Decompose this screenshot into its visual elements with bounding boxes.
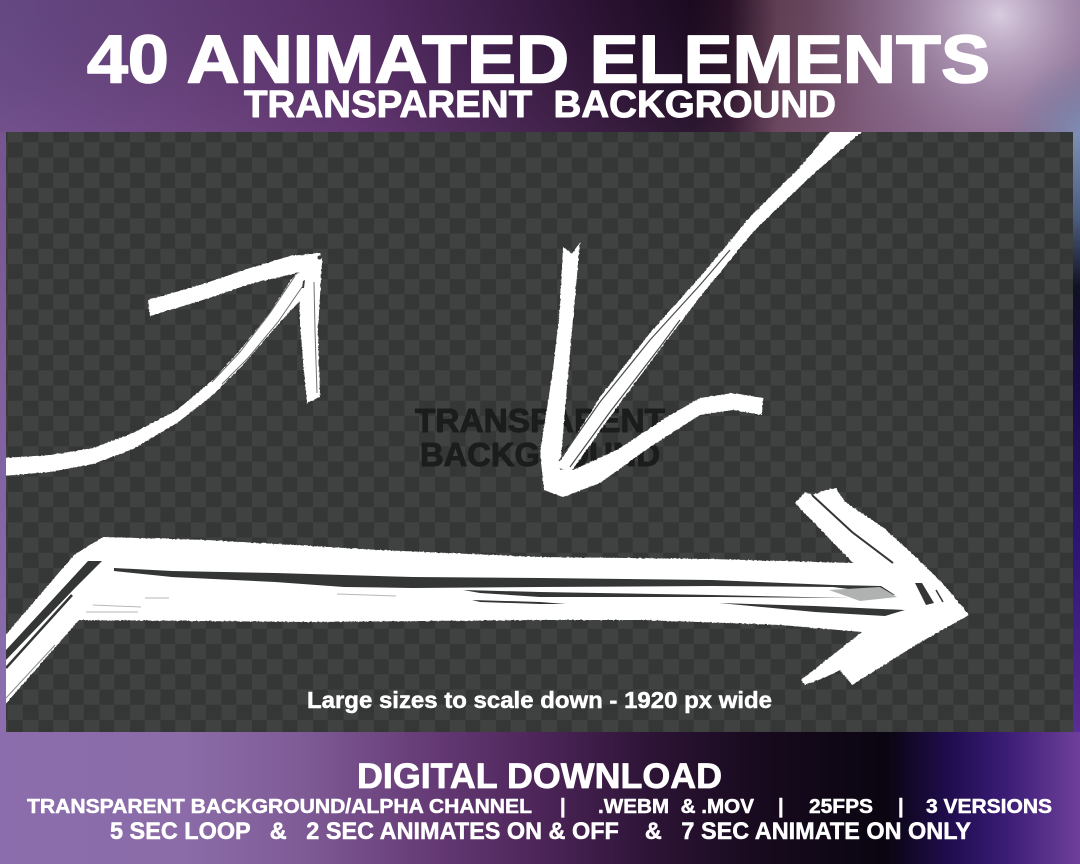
panel: transparent checkerboard preview	[2, 128, 1073, 732]
spec line: formats and versions: .WEBM & .MOV	[598, 796, 755, 818]
spec line: durations: 5 SEC LOOP & 2 SEC ANIMATES ON & OFF & 7 SEC ANIMATE ON ONLY	[110, 818, 971, 845]
spec line: formats and versions: |	[778, 796, 784, 818]
watermark: transparent background: BACKGROUND	[420, 436, 660, 473]
arrow: diagonal downward arrow, center	[540, 128, 866, 497]
background: left strip	[0, 132, 6, 732]
title: 40 ANIMATED ELEMENTS	[87, 22, 990, 98]
subtitle: TRANSPARENT BACKGROUND	[244, 84, 836, 126]
checkerboard background	[6, 132, 1073, 732]
background: bottom gradient band	[0, 732, 1080, 864]
caption: large sizes: Large sizes to scale down - 1920 px wide	[307, 687, 772, 713]
spec line: formats and versions	[27, 796, 1052, 818]
arrow: large horizontal bent arrow, bottom	[2, 488, 969, 708]
arrow: curved upward arrow, top left	[2, 253, 323, 476]
watermark: transparent background	[414, 408, 666, 467]
spec line: formats and versions: |	[560, 796, 566, 818]
spec line: formats and versions: TRANSPARENT BACKGROUND/ALPHA CHANNEL	[27, 796, 532, 818]
spec line: formats and versions: |	[898, 796, 904, 818]
heading: digital download: DIGITAL DOWNLOAD	[357, 757, 722, 796]
spec line: formats and versions: 3 VERSIONS	[926, 796, 1052, 818]
background: top gradient band	[0, 0, 1080, 132]
background: right strip	[1073, 132, 1080, 732]
arrow stripes	[6, 495, 943, 698]
watermark: transparent background: TRANSPARENT	[415, 402, 665, 439]
spec line: formats and versions: 25FPS	[809, 796, 873, 818]
